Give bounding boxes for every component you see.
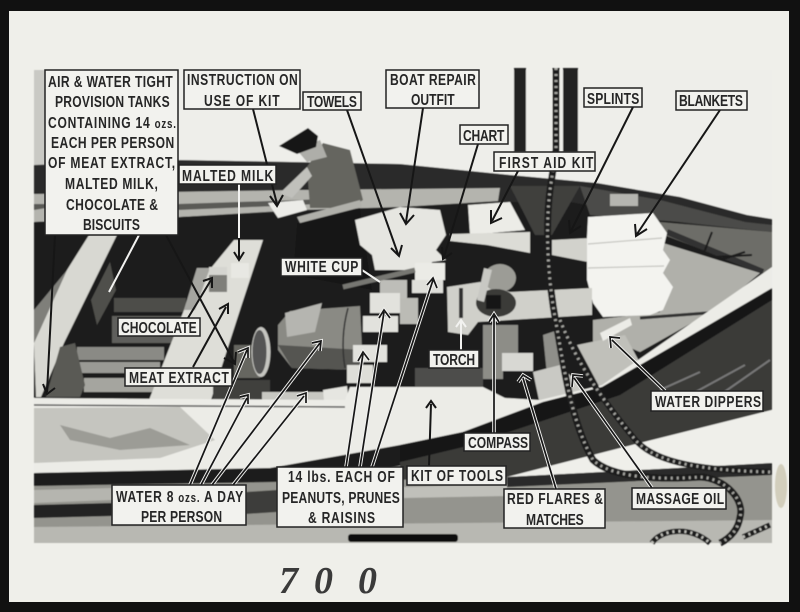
label: chart: CHART bbox=[463, 127, 505, 144]
label: provision tanks: AIR & WATER TIGHT bbox=[48, 73, 173, 90]
label: red flares and matches: MATCHES bbox=[526, 511, 584, 528]
arrow: kit of tools bbox=[426, 401, 436, 466]
dock planks bbox=[34, 463, 772, 543]
arrow: water 3 bbox=[212, 341, 321, 485]
boat interior bbox=[34, 200, 772, 410]
label: peanuts, prunes and raisins: PEANUTS, PRUNES bbox=[282, 489, 400, 506]
label: boat repair outfit: OUTFIT bbox=[411, 91, 455, 108]
arrow: provision tanks white bbox=[109, 235, 139, 292]
arrow: blankets bbox=[635, 110, 720, 236]
label: boat repair outfit: BOAT REPAIR bbox=[390, 71, 476, 88]
label: water ration: WATER 8 ozs. A DAY bbox=[116, 488, 244, 505]
arrow: water dippers bbox=[610, 337, 665, 391]
label: provision tanks: CHOCOLATE & bbox=[66, 196, 158, 213]
label: malted milk: MALTED MILK bbox=[182, 167, 273, 184]
arrow: compass bbox=[489, 314, 499, 433]
label: water ration bbox=[112, 485, 246, 525]
arrow: first aid bbox=[491, 171, 518, 223]
label: first aid kit: FIRST AID KIT bbox=[499, 154, 594, 171]
arrow: boat repair bbox=[400, 108, 423, 224]
handwritten number: 700 bbox=[279, 560, 377, 602]
arrow: red flares bbox=[518, 375, 556, 489]
label: provision tanks: OF MEAT EXTRACT, bbox=[48, 154, 175, 171]
provision boxes bbox=[209, 267, 227, 292]
stack of white boxes bbox=[380, 280, 407, 300]
label: towels: TOWELS bbox=[307, 93, 357, 110]
label: provision tanks: CONTAINING 14 ozs. bbox=[48, 114, 176, 131]
arrow: peanuts bbox=[346, 352, 369, 467]
label: massage oil: MASSAGE OIL bbox=[636, 490, 725, 507]
left plank bbox=[34, 270, 67, 343]
arrow: water 2 bbox=[201, 395, 248, 485]
arrow: water 1 bbox=[190, 348, 248, 485]
near canvas bbox=[34, 267, 772, 473]
label: provision tanks: MALTED MILK, bbox=[65, 175, 158, 192]
ropes bbox=[548, 68, 770, 543]
instruction booklet bbox=[268, 200, 307, 218]
towels bbox=[355, 207, 446, 270]
label: water ration: PER PERSON bbox=[141, 508, 222, 525]
arrow: prunes bbox=[360, 310, 390, 467]
label: instruction on use of kit bbox=[184, 70, 300, 109]
arrow: instruction bbox=[253, 109, 283, 206]
label: compass: COMPASS bbox=[468, 434, 528, 451]
arrow: water 4 bbox=[233, 393, 306, 485]
label: kit of tools: KIT OF TOOLS bbox=[411, 467, 503, 484]
stain at right margin bbox=[775, 464, 787, 508]
floor at bow bbox=[593, 243, 760, 352]
slats bbox=[114, 298, 186, 312]
label: peanuts, prunes and raisins: & RAISINS bbox=[308, 509, 375, 526]
funnel and tank support bbox=[234, 345, 260, 378]
near floor pieces bbox=[213, 380, 270, 402]
compass on bench bbox=[484, 264, 516, 292]
arrow: chart bbox=[442, 144, 478, 259]
arrow: torch bbox=[456, 320, 466, 350]
label: provision tanks: PROVISION TANKS bbox=[55, 93, 170, 110]
first aid pad and shelf bbox=[468, 202, 525, 235]
label: white cup: WHITE CUP bbox=[285, 258, 358, 275]
label: meat extract: MEAT EXTRACT bbox=[129, 369, 229, 386]
tank cylinder bbox=[278, 306, 363, 370]
arrows from labels to kit items bbox=[43, 107, 720, 489]
photograph: lifeboat bbox=[34, 68, 787, 543]
label: boat repair outfit bbox=[386, 70, 479, 108]
arrow: meat extract bbox=[193, 304, 228, 367]
label: provision tanks bbox=[45, 70, 178, 235]
label: instruction on use of kit: USE OF KIT bbox=[204, 92, 280, 109]
arrow: raisins bbox=[372, 278, 437, 467]
water bbox=[507, 410, 772, 477]
label: provision tanks: BISCUITS bbox=[83, 216, 140, 233]
label: provision tanks: EACH PER PERSON bbox=[51, 134, 174, 151]
compass box, flares box and wood bbox=[503, 353, 535, 397]
hull bbox=[400, 289, 772, 480]
arrow: chocolate bbox=[188, 278, 212, 318]
label: peanuts, prunes and raisins bbox=[277, 467, 403, 527]
arrow: massage oil bbox=[572, 375, 652, 488]
arrow: provision tanks left bbox=[43, 235, 55, 394]
label: blankets: BLANKETS bbox=[679, 92, 743, 109]
mast stays bbox=[514, 68, 526, 152]
right bench bbox=[447, 282, 592, 335]
man bbox=[293, 208, 372, 290]
arrow: malted milk shaft bbox=[238, 184, 240, 238]
label: chocolate: CHOCOLATE bbox=[121, 319, 197, 336]
arrow: splints bbox=[569, 107, 633, 233]
arrow: white cup bbox=[362, 270, 380, 282]
label: peanuts, prunes and raisins: 14 lbs. EACH OF bbox=[288, 468, 395, 485]
label: torch: TORCH bbox=[433, 351, 475, 368]
arrow: towels bbox=[347, 110, 402, 256]
arrow: provision tanks right bbox=[166, 235, 236, 364]
blankets bbox=[587, 213, 673, 317]
label: splints: SPLINTS bbox=[587, 90, 639, 107]
rolled canvas on far side bbox=[34, 188, 500, 222]
label: red flares and matches: RED FLARES & bbox=[507, 490, 603, 507]
torch floor plank bbox=[483, 325, 518, 379]
label: red flares and matches bbox=[504, 489, 605, 528]
label: instruction on use of kit: INSTRUCTION ON bbox=[187, 71, 298, 88]
label: water dippers: WATER DIPPERS bbox=[655, 393, 761, 410]
centre thwart bbox=[149, 240, 263, 400]
far gunwale bbox=[34, 160, 772, 300]
arrow: malted milk head bbox=[234, 238, 244, 260]
bow post bbox=[510, 186, 580, 235]
interior slats at bow bbox=[660, 222, 772, 276]
